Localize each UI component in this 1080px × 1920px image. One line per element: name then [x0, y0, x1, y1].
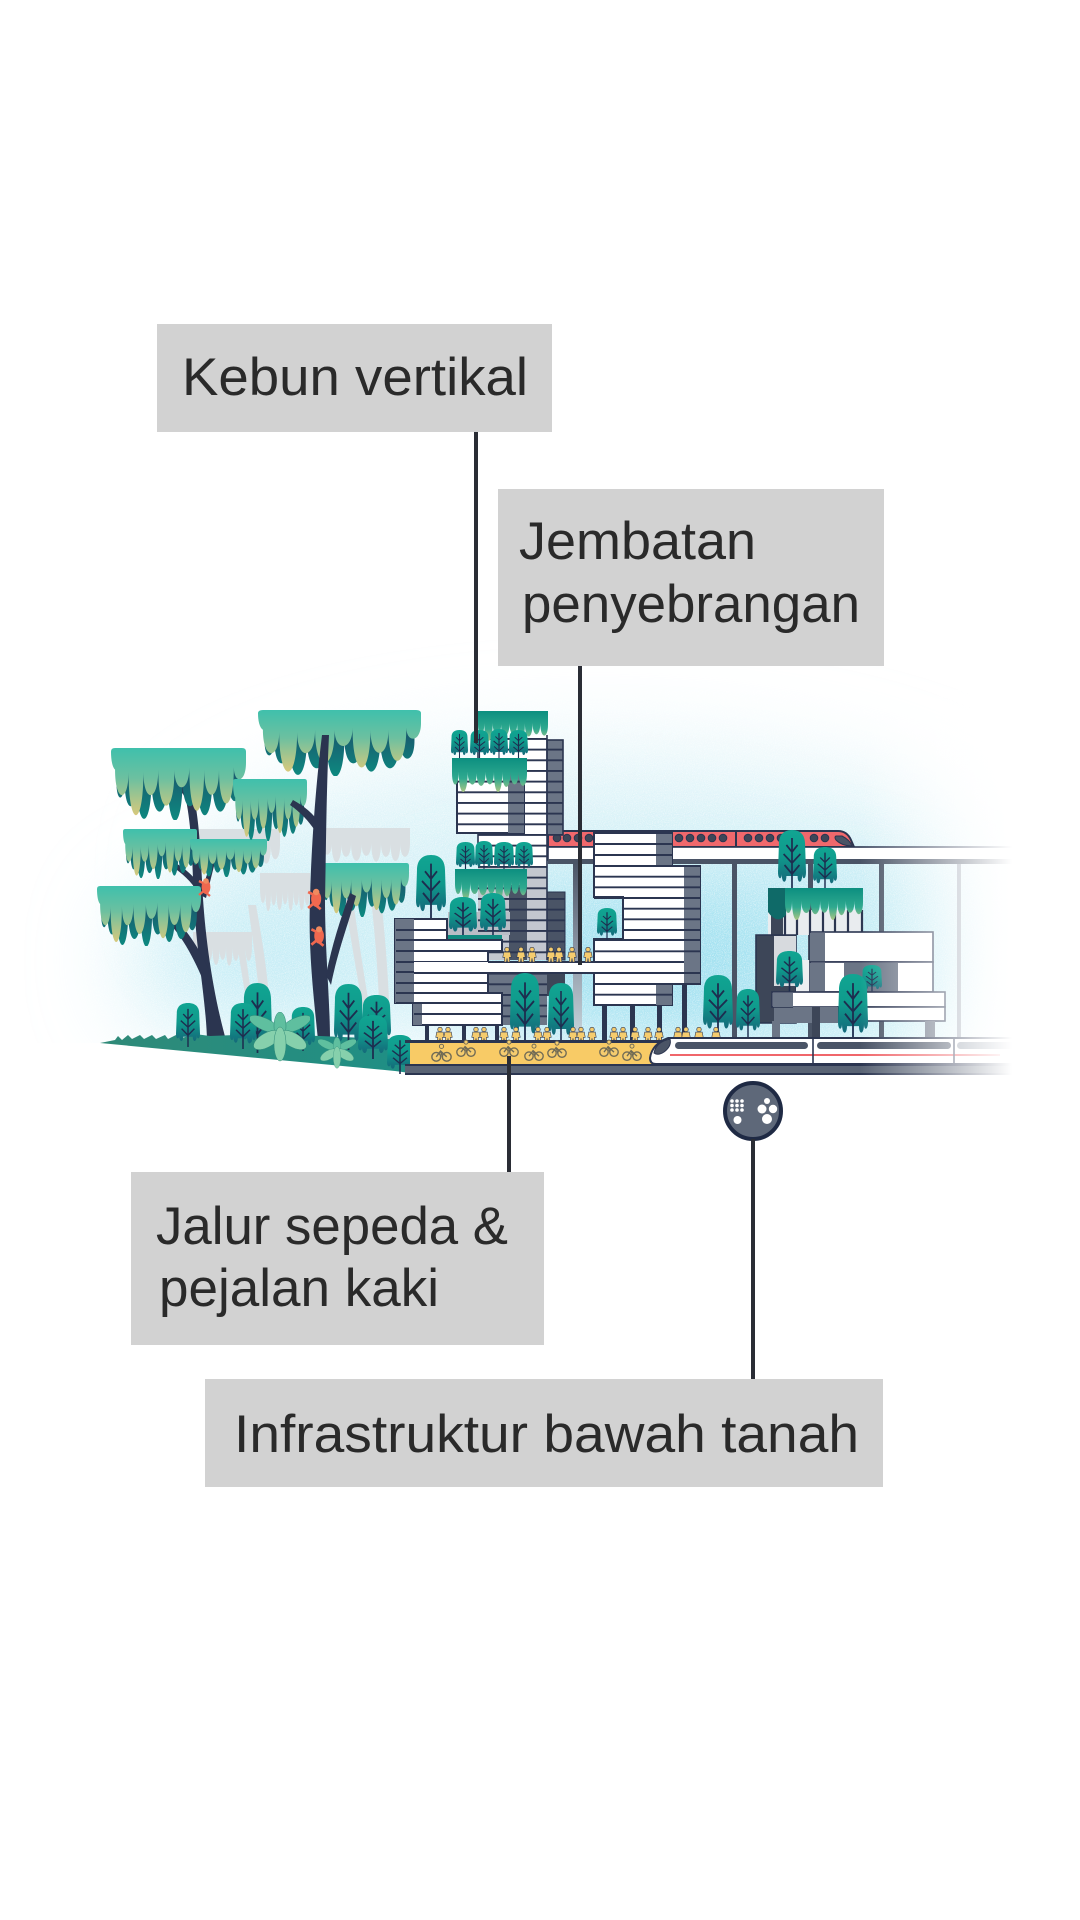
ground with grass — [100, 1034, 410, 1073]
ferns — [247, 1012, 358, 1068]
tree on left building — [416, 855, 446, 920]
forest tree right — [233, 710, 421, 1040]
right building — [594, 833, 700, 1041]
viaduct deck — [548, 847, 1028, 860]
upper train and viaduct deck — [548, 831, 1028, 864]
forest tree left — [97, 748, 267, 1040]
label: Jalur sepeda & pejalan kaki: pejalan kaki — [159, 1259, 439, 1318]
label: Infrastruktur bawah tanah — [205, 1379, 883, 1487]
left building — [395, 919, 502, 1041]
right edge white-out — [1012, 690, 1080, 1090]
cycling and walking lane — [405, 1040, 675, 1066]
label: Jembatan penyebrangan: penyebrangan — [522, 575, 860, 634]
label: Jembatan penyebrangan — [498, 489, 884, 666]
label: Jalur sepeda & pejalan kaki: Jalur sepeda & — [156, 1197, 508, 1256]
street trees — [510, 973, 760, 1043]
illustration: forest city scene — [97, 710, 1006, 1075]
label: Jalur sepeda & pejalan kaki — [131, 1172, 544, 1345]
leader line: Infrastruktur bawah tanah — [751, 1139, 755, 1379]
icon: orange primates — [199, 878, 324, 946]
viaduct columns — [573, 862, 961, 1040]
label: Kebun vertikal — [157, 324, 552, 432]
pedestrians at street level — [436, 1027, 720, 1042]
leader line: Kebun vertikal — [474, 432, 478, 743]
label: Kebun vertikal: Kebun vertikal — [182, 348, 528, 407]
label: Jembatan penyebrangan: Jembatan — [519, 512, 756, 571]
label: Infrastruktur bawah tanah: Infrastruktur bawah tanah — [234, 1405, 859, 1464]
main tower — [448, 735, 565, 1025]
right edge fade — [860, 690, 1012, 1090]
upper train — [548, 831, 854, 847]
icon: underground infrastructure — [725, 1083, 781, 1139]
leader line: Jembatan penyebrangan — [578, 666, 582, 965]
right-hand building cluster — [756, 830, 945, 1042]
forest small trees — [176, 983, 413, 1074]
blue mist background — [98, 716, 974, 1040]
vertical garden: lower terrace — [448, 841, 533, 939]
vertical garden: terrace block — [452, 758, 527, 833]
pedestrians on bridge — [503, 947, 592, 962]
ghost trees in the mist — [193, 828, 410, 1040]
lower train — [650, 1038, 1030, 1064]
leader line: Jalur sepeda — [507, 1056, 511, 1172]
road surface — [405, 1064, 1045, 1075]
pedestrian bridge — [414, 962, 684, 973]
vertical garden: top block — [451, 711, 548, 759]
